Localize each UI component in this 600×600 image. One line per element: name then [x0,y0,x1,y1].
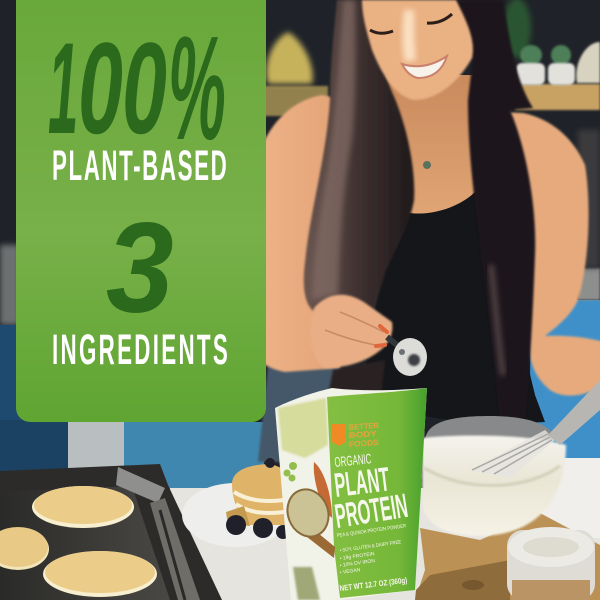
hand [310,295,392,368]
bag title: • 19g PROTEIN [339,551,375,562]
bag title: • 10% DV IRON [339,558,376,569]
counter and griddle [0,458,600,600]
bag title: ORGANIC [334,450,372,470]
hair below hand [325,360,385,410]
right hair [455,0,535,420]
heading: 3: 3 [106,197,174,340]
griddle [0,464,222,600]
jeans [258,360,340,462]
necklace [423,161,431,169]
heading: 100%: 0 [122,15,167,161]
bag title [332,450,410,593]
label: plant-based: PLANT-BASED [52,142,227,190]
eyes [370,30,393,33]
bag body [275,388,427,600]
glass jar [507,527,595,600]
heading: 100%: % [168,7,226,171]
left arm [237,95,345,372]
green panel [16,0,266,422]
mixing bowl with whisk [422,380,600,536]
bag title: PEA & QUINOA PROTEIN POWDER [336,523,407,539]
whisk [470,380,600,478]
bag title: PLANT [332,461,392,505]
black tank top [360,190,545,425]
shelf [262,86,328,116]
product bag [275,388,427,600]
heading: 100%: 0 [78,15,123,161]
plants and pots [503,0,600,85]
woman [237,0,600,462]
bag logo [332,421,380,449]
face [362,0,473,100]
heading: 100% [48,7,226,171]
scoop [387,337,397,345]
bag title: • VEGAN [339,567,361,576]
bag title: • SOY, GLUTEN & DAIRY FREE [339,539,402,554]
smile [402,56,447,78]
right arm [500,112,600,396]
wooden board [415,513,600,600]
label: ingredients: INGREDIENTS [52,326,228,374]
vase [266,32,313,84]
bag title: NET WT 12.7 OZ (360g) [339,576,408,593]
heading: 100%: 1 [48,17,78,162]
left hair [304,0,414,330]
plate of pancakes [182,458,290,547]
bag logo: BETTER [349,421,379,432]
chest and neck [385,75,490,230]
bag logo: FOODS [349,438,380,449]
bag logo: BODY [349,429,378,440]
bag title: PROTEIN [332,487,410,536]
bag photo: ingredients [278,398,328,458]
fingernails [376,326,387,346]
griddle pancakes [32,486,134,528]
